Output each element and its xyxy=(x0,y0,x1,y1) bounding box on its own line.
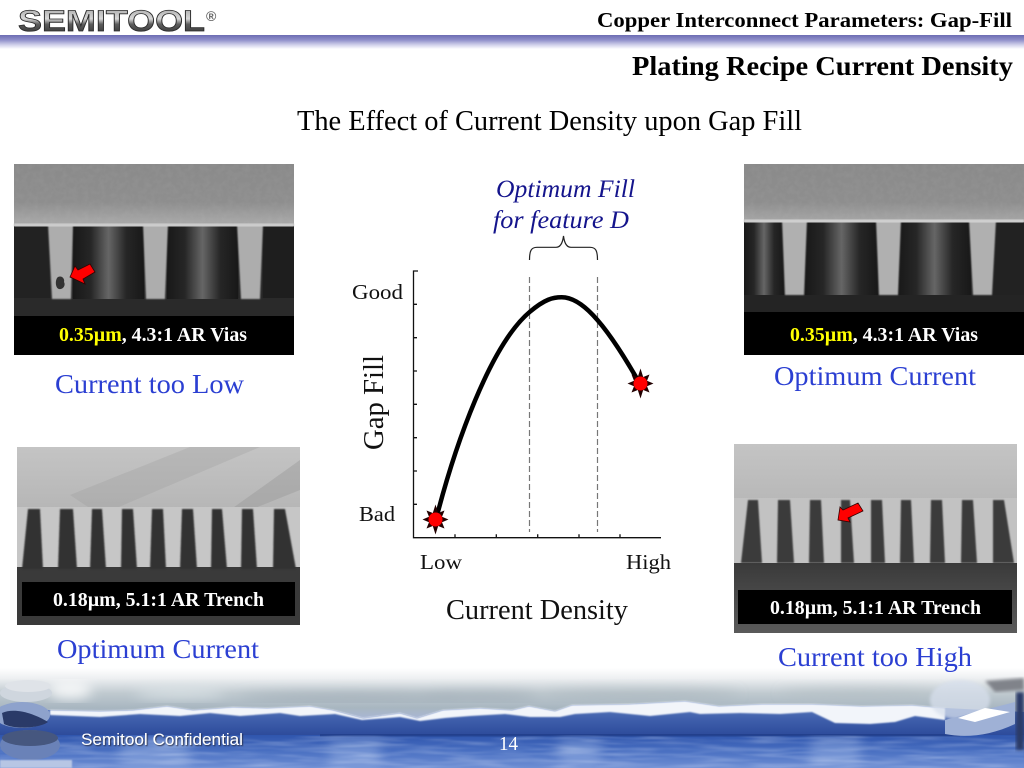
caption: 0.35µm, 4.3:1 AR Vias xyxy=(790,325,978,346)
heading: The Effect of Current Density upon Gap Fill xyxy=(297,106,802,137)
x tick label high: High xyxy=(626,550,671,574)
x tick label low: Low xyxy=(420,550,462,574)
void in via xyxy=(56,276,65,289)
label: current too low: Current too Low xyxy=(55,368,244,399)
panel: SEM optimum current trenches xyxy=(17,447,300,625)
lake xyxy=(0,735,1024,768)
callout: optimum fill: Optimum Fill xyxy=(496,174,635,203)
label: optimum current left: Optimum Current xyxy=(57,633,259,664)
fill curve xyxy=(437,297,637,517)
slide subtitle: Plating Recipe Current Density xyxy=(632,50,1013,81)
y tick label good: Good xyxy=(352,280,403,304)
x axis title: Current Density xyxy=(446,595,628,626)
page number: 14 xyxy=(499,733,518,755)
header title: Copper Interconnect Parameters: Gap-Fill xyxy=(597,8,1012,32)
logo: SEMITOOL: ® xyxy=(206,8,217,24)
caption: 0.18µm, 5.1:1 AR Trench xyxy=(770,598,981,619)
icon: stones right xyxy=(930,678,1024,750)
marker: low end burst xyxy=(422,504,448,534)
marker: high end burst xyxy=(628,368,654,398)
chart: gap fill vs current density xyxy=(352,174,671,626)
footer text: confidential: Semitool Confidential xyxy=(81,730,243,749)
snow xyxy=(50,701,945,724)
footer banner: lake and mountains xyxy=(0,668,1024,768)
axes xyxy=(414,271,661,538)
callout: optimum fill: for feature D xyxy=(493,205,630,234)
arrow: void marker xyxy=(838,503,863,522)
optimum window dashed lines xyxy=(530,277,598,532)
label: optimum current right: Optimum Current xyxy=(774,360,976,391)
mountains xyxy=(0,701,1024,736)
callout: optimum fill xyxy=(493,174,635,234)
y tick label bad: Bad xyxy=(359,502,395,526)
icon: stacked stones left xyxy=(0,680,72,768)
panel: SEM too high current trenches xyxy=(734,444,1017,633)
brace xyxy=(530,236,598,260)
y axis title: Gap Fill xyxy=(358,355,390,450)
arrow: void marker xyxy=(70,264,95,284)
caption: 0.35µm, 4.3:1 AR Vias xyxy=(59,325,247,346)
caption: 0.18µm, 5.1:1 AR Trench xyxy=(53,590,264,611)
panel: SEM too low current vias xyxy=(14,164,294,355)
logo: SEMITOOL: SEMITOOL xyxy=(18,5,205,38)
panel: SEM optimum current vias xyxy=(744,164,1024,355)
header: logo and purple band xyxy=(0,5,1024,49)
label: current too high: Current too High xyxy=(778,641,972,672)
